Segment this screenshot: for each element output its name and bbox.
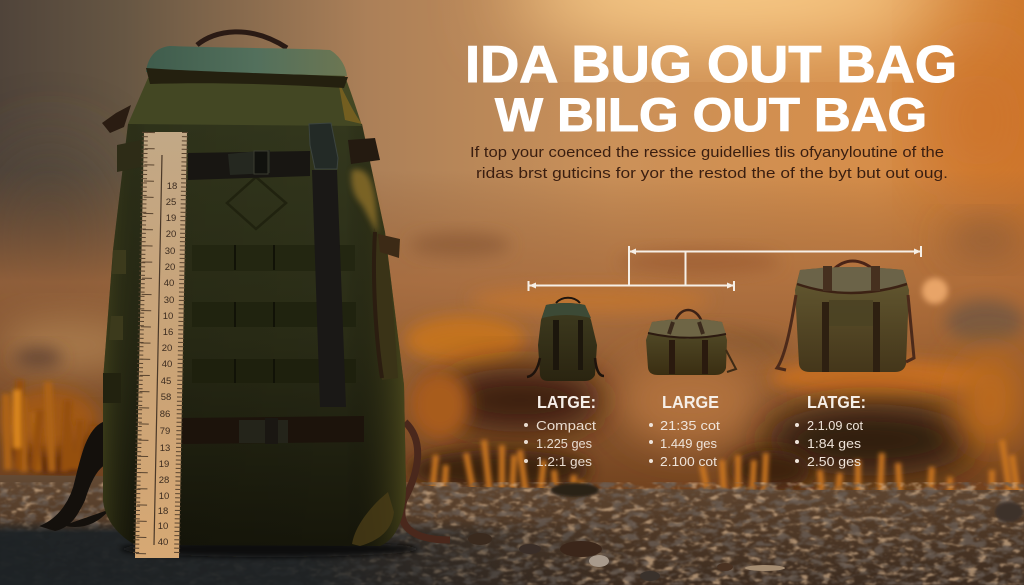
ruler numbers: 19 (166, 213, 176, 224)
ruler numbers: 19 (159, 459, 169, 470)
size column: compact: 1.2:1 ges (536, 454, 593, 469)
upper flap (128, 70, 362, 126)
ruler numbers: 28 (159, 475, 169, 486)
icon: top handle (197, 32, 287, 48)
size column: medium: LARGE (662, 392, 719, 412)
side clip (102, 105, 131, 133)
backpack shadow on ground (120, 541, 420, 557)
large bag (777, 261, 914, 372)
size column: medium: 1.449 ges (660, 436, 717, 451)
ruler (135, 132, 187, 558)
icon: chest buckle (228, 150, 270, 175)
chest strap (188, 151, 310, 180)
main backpack (42, 32, 450, 558)
vertical strap (312, 170, 346, 407)
title (465, 36, 957, 141)
subtitle text: If top your coenced the ressice guidellies tlis ofyanyloutine of the (470, 144, 944, 161)
ruler numbers: 20 (166, 229, 176, 240)
ruler numbers: 18 (167, 181, 177, 192)
size column: medium: 21:35 cot (660, 418, 720, 433)
size column: large: LATGE: (807, 392, 866, 412)
background: blurred orange hills and shrubs (0, 222, 1024, 490)
ruler numbers: 45 (161, 376, 171, 387)
zipper band (146, 68, 348, 88)
size column: medium: 2.100 cot (660, 454, 717, 469)
size comparison dimension lines (528, 246, 921, 291)
background: orange grass tufts (432, 440, 1018, 495)
size column: large (795, 392, 866, 469)
subtitle text: ridas brst guticins for yor the restod the of the byt but out oug. (476, 165, 948, 182)
ruler numbers: 13 (160, 443, 170, 454)
side loops (117, 140, 141, 172)
ruler numbers: 18 (158, 506, 168, 517)
small backpack (527, 298, 604, 381)
size column: medium (649, 392, 720, 469)
side pocket zip (373, 228, 398, 380)
ruler ticks (136, 132, 145, 556)
right side light (351, 169, 378, 235)
ground (0, 475, 1024, 585)
ruler numbers: 20 (162, 343, 172, 354)
icon: waist buckle (239, 420, 288, 443)
size column: large: 2.50 ges (807, 454, 862, 469)
title: IDA BUG OUT BAG (465, 36, 957, 94)
webbing rows (192, 245, 355, 271)
ruler numbers: 58 (161, 392, 171, 403)
right shoulder strap (402, 422, 450, 540)
ruler numbers: 79 (160, 426, 170, 437)
left shoulder strap (42, 423, 108, 530)
size column: compact (524, 392, 596, 469)
ruler numbers: 25 (166, 197, 176, 208)
ruler numbers: 16 (163, 327, 173, 338)
size column: large: 1:84 ges (807, 436, 862, 451)
ruler numbers: 86 (160, 409, 170, 420)
ruler numbers: 10 (159, 491, 169, 502)
size column: large: 2.1.09 cot (807, 418, 863, 433)
ruler numbers: 10 (158, 521, 168, 532)
shrub on the left (2, 380, 108, 475)
size column: compact: 1.225 ges (536, 436, 592, 451)
ruler numbers (158, 181, 177, 548)
ruler numbers: 10 (163, 311, 173, 322)
lid (146, 46, 347, 76)
subtitle text (470, 144, 948, 182)
ruler numbers: 40 (158, 537, 168, 548)
ruler numbers: 30 (164, 295, 174, 306)
bottom corner highlight (352, 492, 394, 546)
ruler numbers: 40 (164, 278, 174, 289)
left side pockets (103, 373, 121, 403)
icon: top vertical buckle (309, 123, 338, 169)
icon: emblem diamond (227, 177, 286, 229)
ruler numbers: 30 (165, 246, 175, 257)
title: W BILG OUT BAG (495, 88, 927, 141)
ruler numbers: 40 (162, 359, 172, 370)
medium bag (646, 310, 736, 375)
waist strap (182, 416, 364, 444)
body shell (103, 124, 406, 546)
size column: compact: Compact (536, 418, 596, 433)
size column: compact: LATGE: (537, 392, 596, 412)
ruler numbers: 20 (165, 262, 175, 273)
